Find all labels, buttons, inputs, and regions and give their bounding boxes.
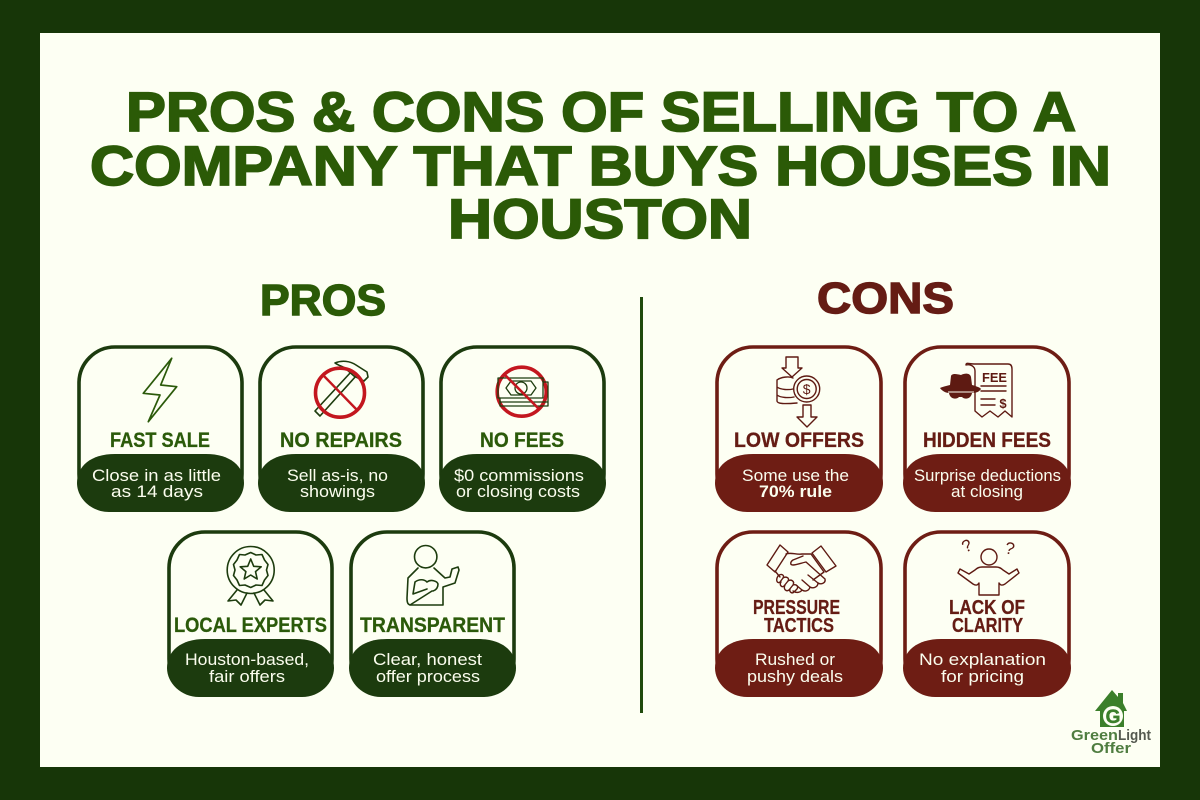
card: pressure tactics	[715, 532, 883, 697]
card: transparent	[349, 532, 516, 697]
label: CLARITY	[952, 615, 1024, 637]
icon: person with hand on heart	[407, 546, 459, 605]
icon: crossed-out hammer	[315, 361, 368, 417]
description: Some use the	[742, 466, 849, 485]
description: showings	[300, 482, 375, 501]
description	[373, 650, 482, 686]
heading: cons: CONS	[817, 274, 954, 323]
description: Close in as little	[92, 466, 221, 485]
center divider	[640, 297, 643, 713]
description	[287, 466, 388, 501]
logo: GreenLight Offer: G	[1106, 707, 1120, 728]
description: 70% rule	[759, 482, 832, 501]
icon: confused person shrugging: ?	[959, 535, 975, 557]
icon: coins with down arrows	[777, 357, 820, 427]
logo: GreenLight Offer: Offer	[1091, 740, 1131, 757]
description: No explanation	[919, 650, 1046, 669]
description	[914, 466, 1061, 501]
description	[92, 466, 221, 501]
card: fast sale	[77, 347, 244, 512]
label	[753, 597, 840, 637]
description	[742, 466, 849, 501]
description: or closing costs	[456, 482, 580, 501]
title: HOUSTON	[448, 187, 752, 250]
icon: handshake	[767, 545, 836, 593]
title	[90, 80, 1111, 250]
icon: confused person shrugging	[958, 535, 1019, 595]
icon: hat and fee receipt: FEE	[982, 370, 1007, 385]
description: offer process	[376, 667, 480, 686]
card: local experts	[167, 532, 334, 697]
label: NO FEES	[480, 428, 564, 452]
icon: award rosette	[227, 546, 274, 605]
icon: hat and fee receipt: $	[999, 396, 1007, 411]
card: lack of clarity	[903, 532, 1071, 697]
description: Sell as-is, no	[287, 466, 388, 485]
title: PROS & CONS OF SELLING TO A	[126, 80, 1076, 143]
logo: GreenLight Offer: Green	[1071, 727, 1118, 744]
heading: pros: PROS	[260, 276, 386, 325]
description	[454, 466, 584, 501]
card: hidden fees	[903, 347, 1071, 512]
description: at closing	[951, 482, 1023, 501]
description: Clear, honest	[373, 650, 482, 669]
icon: crossed-out money	[497, 367, 548, 416]
label: PRESSURE	[753, 597, 840, 619]
label: LACK OF	[949, 597, 1025, 619]
label: TRANSPARENT	[360, 613, 505, 637]
label: LOCAL EXPERTS	[174, 613, 327, 637]
label	[949, 597, 1025, 637]
label: LOW OFFERS	[734, 428, 864, 452]
description: $0 commissions	[454, 466, 584, 485]
label: FAST SALE	[110, 428, 210, 452]
title: COMPANY THAT BUYS HOUSES IN	[90, 134, 1111, 197]
label: NO REPAIRS	[280, 428, 402, 452]
logo: GreenLight Offer	[1071, 690, 1151, 757]
logo: GreenLight Offer: Light	[1118, 727, 1151, 744]
description	[919, 650, 1046, 686]
card: no repairs	[258, 347, 425, 512]
description	[185, 650, 309, 686]
description: for pricing	[941, 667, 1024, 686]
icon: confused person shrugging: ?	[1003, 538, 1016, 559]
description: fair offers	[209, 667, 285, 686]
icon: hat and fee receipt	[940, 363, 1012, 417]
description: Surprise deductions	[914, 466, 1061, 485]
icon: coins with down arrows: $	[803, 381, 811, 397]
description: Houston-based,	[185, 650, 309, 669]
description: Rushed or	[755, 650, 835, 669]
description: pushy deals	[747, 667, 843, 686]
card: no fees	[439, 347, 606, 512]
description: as 14 days	[111, 482, 203, 501]
label: TACTICS	[764, 615, 834, 637]
label: HIDDEN FEES	[923, 428, 1051, 452]
description	[747, 650, 843, 686]
icon: lightning bolt	[143, 358, 177, 422]
card: low offers	[715, 347, 883, 512]
